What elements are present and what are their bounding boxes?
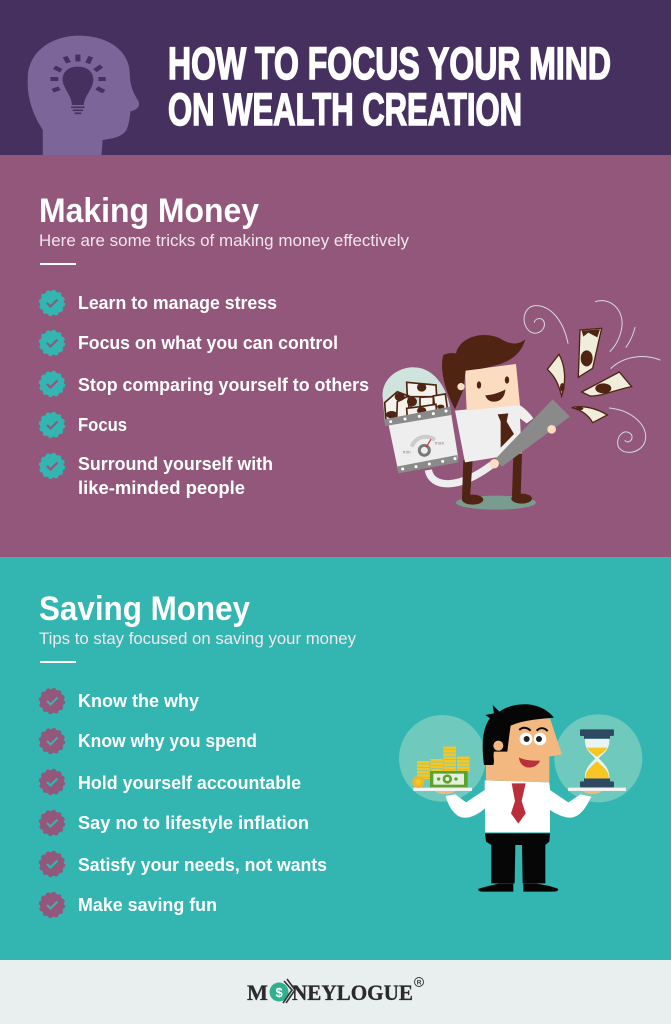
checklist: making money: Stop comparing yourself to others [78,375,369,395]
checklist: saving money: Know the why [78,691,199,711]
logo: moneylogue: $ [276,985,284,1000]
checklist: making money: like-minded people [78,478,245,498]
checklist: saving money: Satisfy your needs, not wants [78,855,327,875]
gauge [403,437,445,455]
gauge: min [403,449,411,455]
subtitle: saving money: Tips to stay focused on saving your money [39,630,357,648]
swirl lines [524,301,660,452]
icon: head with light bulb [28,36,139,155]
footer [0,960,671,1024]
checklist: saving money: Hold yourself accountable [78,773,301,793]
man [446,704,591,892]
subtitle: making money: Here are some tricks of making money effectively [39,232,410,250]
panel: making money [0,155,671,557]
checklist: making money: Surround yourself with [78,454,273,474]
tray with hourglass [568,729,626,794]
checklist: saving money [40,689,327,917]
man [442,335,533,505]
panel: saving money [0,557,671,960]
logo: moneylogue: R [417,980,422,986]
logo: moneylogue: NEYLOGUE [292,980,413,1005]
title [168,38,611,135]
checklist: making money [40,291,369,498]
money tank [383,367,492,484]
flying bills [547,328,632,423]
checklist: making money: Focus [78,415,127,435]
header banner [0,0,671,155]
illustration: man balancing money and time [399,704,642,892]
illustration: man with money vacuum [383,301,660,510]
title: ON WEALTH CREATION [168,84,522,135]
checklist: saving money: Make saving fun [78,895,217,915]
heading: saving money: Saving Money [39,590,250,628]
checklist: saving money: Say no to lifestyle inflation [78,813,309,833]
heading: making money: Making Money [39,192,259,230]
tray with coins and cash [412,747,472,794]
nozzle [490,399,570,468]
logo: moneylogue [247,978,424,1005]
checklist: making money: Focus on what you can control [78,333,338,353]
checklist: saving money: Know why you spend [78,731,257,751]
logo: moneylogue: M [247,980,268,1005]
gauge: max [435,441,445,447]
checklist: making money: Learn to manage stress [78,293,277,313]
